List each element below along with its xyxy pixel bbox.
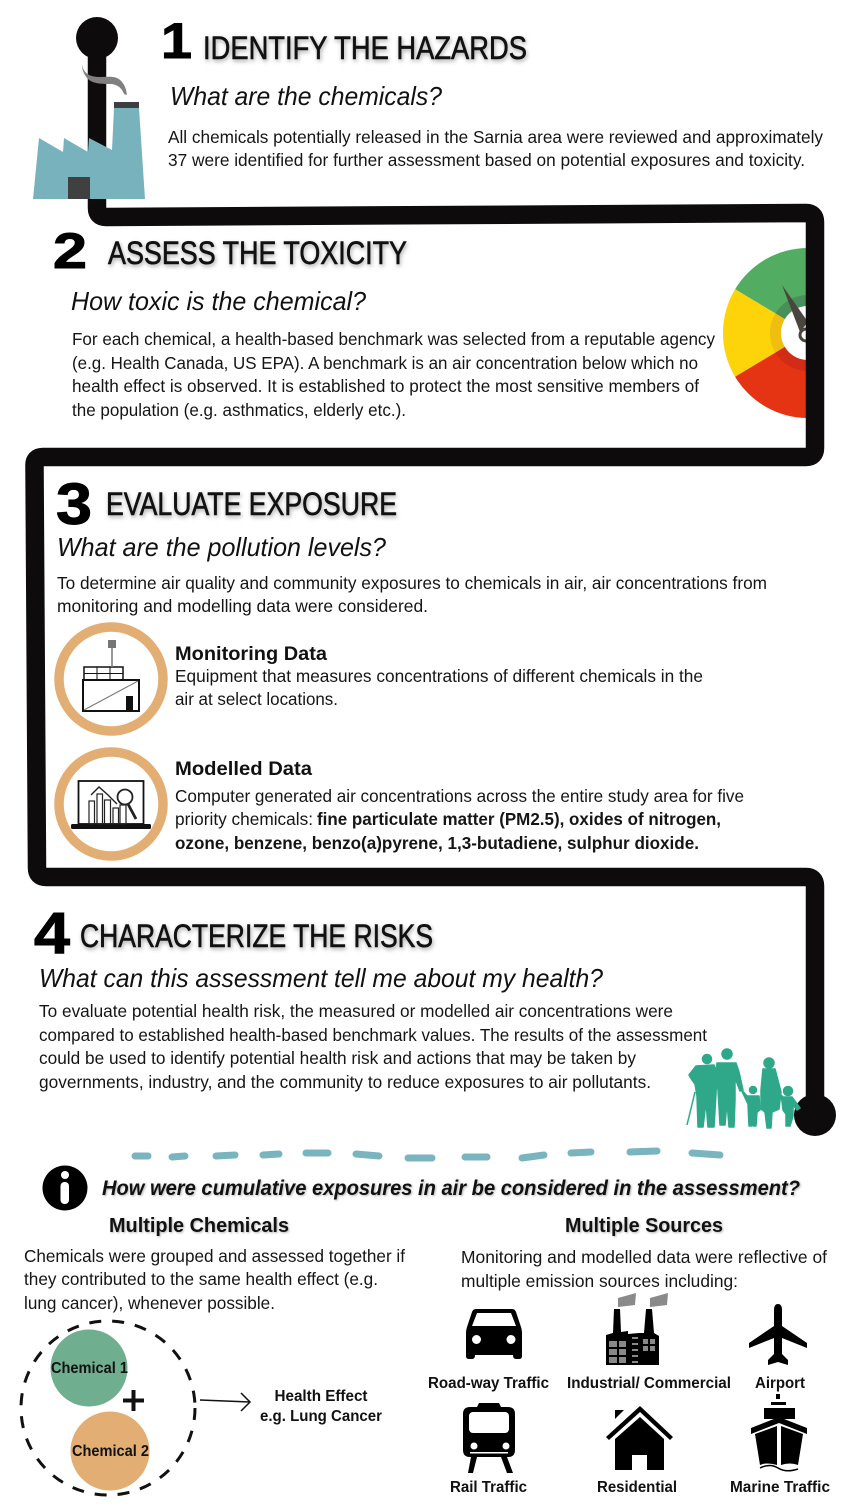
- source labels: Airport: [755, 1375, 805, 1392]
- body text 4: governments, industry, and the community to reduce exposures to air pollutants.: [39, 1072, 651, 1092]
- icon: monitoring station: [59, 627, 163, 731]
- health effect label: e.g. Lung Cancer: [260, 1408, 382, 1425]
- modelled data text: fine particulate matter (PM2.5), oxides of nitrogen,: [317, 809, 721, 829]
- cumulative exposures question: How were cumulative exposures in air be considered in the assessment?: [102, 1177, 800, 1200]
- heading: evaluate exposure: EVALUATE EXPOSURE: [106, 486, 397, 522]
- icon: train: [463, 1403, 515, 1473]
- body text 2: health effect is observed. It is established to protect the most sensitive members of: [72, 376, 699, 396]
- multiple chemicals text: they contributed to the same health effect (e.g.: [24, 1269, 378, 1289]
- connecting path line: [34, 17, 836, 1136]
- icon: info: [42, 1166, 88, 1210]
- arrow: [200, 1393, 250, 1411]
- icon: family silhouettes: [687, 1049, 800, 1128]
- number 3: 3: [56, 472, 92, 537]
- multiple sources text: [461, 1247, 827, 1291]
- modelled data text: Computer generated air concentrations across the entire study area for five: [175, 786, 744, 806]
- diagram: combined chemicals: [21, 1321, 195, 1495]
- icon: car: [466, 1309, 522, 1359]
- icon: house: [606, 1406, 673, 1470]
- source labels: Marine Traffic: [730, 1479, 830, 1496]
- body text 3: [57, 573, 767, 616]
- number 4: 4: [34, 901, 70, 966]
- modelled data text: [175, 758, 744, 853]
- body text 4: could be used to identify potential health risk and actions that may be taken by: [39, 1048, 636, 1068]
- body text 1: 37 were identified for further assessment based on potential exposures and toxicity.: [168, 150, 805, 170]
- source labels: Residential: [597, 1479, 677, 1496]
- icon: industrial: [606, 1293, 668, 1365]
- body text 3: monitoring and modelling data were considered.: [57, 596, 428, 616]
- heading: identify the hazards: IDENTIFY THE HAZARDS: [203, 30, 527, 66]
- source labels: Rail Traffic: [450, 1479, 527, 1496]
- heading: multiple chemicals: Multiple Chemicals: [109, 1215, 289, 1237]
- modelled data text: priority chemicals:: [175, 809, 313, 829]
- question 4: What can this assessment tell me about my health?: [39, 963, 604, 993]
- icon: modelled data laptop: [59, 752, 163, 856]
- body text 3: To determine air quality and community exposures to chemicals in air, air concentrations from: [57, 573, 767, 593]
- question 1: What are the chemicals?: [170, 81, 443, 111]
- multiple chemicals text: lung cancer), whenever possible.: [24, 1293, 275, 1313]
- icon: risk gauge: [723, 248, 835, 418]
- multiple chemicals text: [24, 1246, 405, 1313]
- heading: assess the toxicity: ASSESS THE TOXICITY: [108, 235, 407, 271]
- number 2: 2: [53, 223, 87, 279]
- modelled data text: ozone, benzene, benzo(a)pyrene, 1,3-butadiene, sulphur dioxide.: [175, 833, 699, 853]
- source labels: Road-way Traffic: [428, 1375, 549, 1392]
- body text 2: [72, 329, 715, 420]
- body text 2: For each chemical, a health-based benchmark was selected from a reputable agency: [72, 329, 715, 349]
- diagram: combined chemicals: Chemical 1: [51, 1360, 128, 1377]
- section 1: [161, 13, 823, 170]
- body text 4: To evaluate potential health risk, the measured or modelled air concentrations were: [39, 1001, 673, 1021]
- heading: characterize the risks: CHARACTERIZE THE RISKS: [80, 918, 433, 954]
- modelled data text: Modelled Data: [175, 758, 312, 780]
- body text 2: the population (e.g. asthmatics, elderly etc.).: [72, 400, 406, 420]
- number 1: 1: [161, 13, 192, 69]
- body text 4: [39, 1001, 707, 1092]
- monitoring data text: Monitoring Data: [175, 643, 327, 665]
- monitoring data text: air at select locations.: [175, 689, 338, 709]
- multiple chemicals text: Chemicals were grouped and assessed together if: [24, 1246, 405, 1266]
- monitoring data text: Equipment that measures concentrations of different chemicals in the: [175, 666, 703, 686]
- body text 4: compared to established health-based benchmark values. The results of the assessment: [39, 1025, 707, 1045]
- panel: multiple chemicals: [21, 1215, 405, 1495]
- source labels: Industrial/ Commercial: [567, 1375, 731, 1392]
- section 4: [34, 901, 707, 1092]
- icon: airplane: [749, 1304, 807, 1365]
- monitoring data text: [175, 643, 703, 709]
- section 2: [53, 223, 715, 420]
- section 3: [56, 472, 767, 856]
- health effect label: Health Effect: [274, 1388, 368, 1405]
- panel: multiple sources: [428, 1215, 830, 1496]
- body text 1: [168, 127, 823, 170]
- source labels: [428, 1375, 830, 1496]
- multiple sources text: multiple emission sources including:: [461, 1271, 738, 1291]
- question 3: What are the pollution levels?: [57, 532, 387, 562]
- icon: ship: [751, 1394, 807, 1471]
- icon: factory: [33, 65, 145, 199]
- multiple sources text: Monitoring and modelled data were reflective of: [461, 1247, 827, 1267]
- health effect label: [260, 1388, 382, 1425]
- body text 1: All chemicals potentially released in the Sarnia area were reviewed and approximately: [168, 127, 823, 147]
- diagram: combined chemicals: Chemical 2: [72, 1443, 149, 1460]
- heading: multiple sources: Multiple Sources: [565, 1215, 723, 1237]
- question 2: How toxic is the chemical?: [71, 286, 367, 316]
- body text 2: (e.g. Health Canada, US EPA). A benchmark is an air concentration below which no: [72, 353, 698, 373]
- dashed divider: [135, 1151, 720, 1158]
